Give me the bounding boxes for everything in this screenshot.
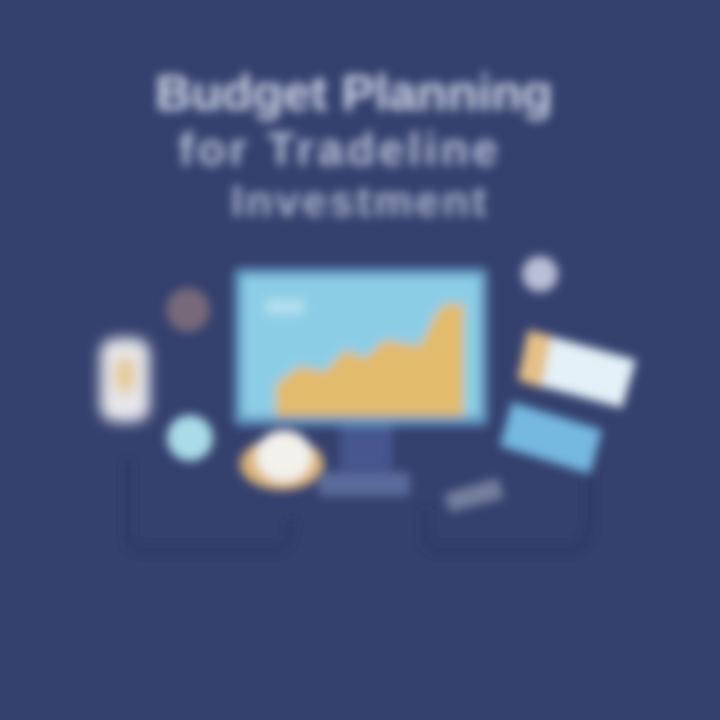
title	[151, 65, 557, 226]
title: Budget Planning	[155, 65, 553, 121]
icon: blue circle	[167, 415, 213, 461]
monitor base	[340, 426, 392, 470]
icon: desk lines	[128, 460, 590, 550]
icon: coin top left	[166, 288, 210, 332]
icon: dot top right	[522, 256, 558, 292]
chart label	[266, 300, 304, 314]
icon: keyboard tag	[444, 478, 504, 512]
icon: phone left	[100, 338, 150, 422]
icon: piggy bank	[240, 430, 324, 490]
icon: cards right	[500, 330, 636, 474]
chart: area	[276, 304, 464, 416]
monitor	[234, 268, 488, 496]
title: Investment	[231, 177, 489, 226]
title: for Tradeline	[179, 123, 501, 175]
